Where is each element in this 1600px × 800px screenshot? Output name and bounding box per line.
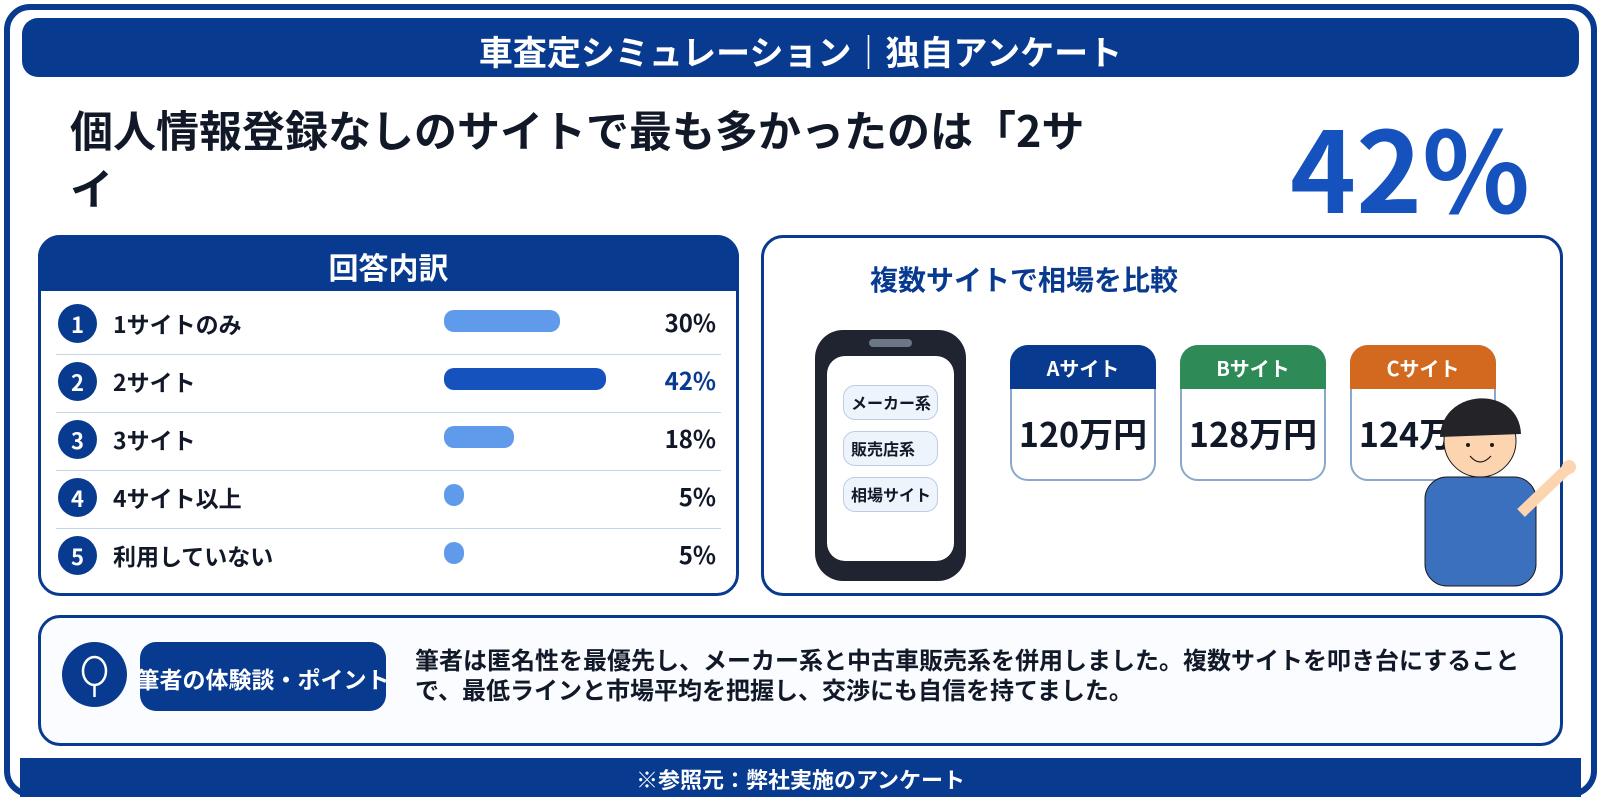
header banner: 車査定シミュレーション｜独自アンケート bbox=[479, 26, 1122, 75]
main heading: 個人情報登録なしのサイトで最も多かったのは「2サ bbox=[70, 98, 1084, 160]
icon: phone bbox=[815, 330, 966, 581]
icon: light bulb bbox=[62, 642, 127, 707]
key figure 42%: 42% bbox=[1290, 84, 1530, 246]
row 3: 3サイト bbox=[113, 422, 196, 456]
panel heading: response breakdown: 回答内訳 bbox=[328, 244, 448, 288]
phone list item: market site: 相場サイト bbox=[851, 482, 931, 506]
panel: compare sites bbox=[761, 235, 1563, 596]
main heading bbox=[70, 98, 1084, 218]
row 2: 2サイト bbox=[113, 364, 196, 398]
icon: presenter character bbox=[1424, 398, 1576, 586]
row 4: 5% bbox=[679, 478, 716, 513]
row 5: 5 bbox=[71, 540, 84, 572]
card: site B: Bサイト bbox=[1216, 353, 1290, 382]
experience text: 筆者は匿名性を最優先し、メーカー系と中古車販売系を併用しました。複数サイトを叩き台にすること bbox=[415, 641, 1519, 676]
row 1: 30% bbox=[665, 304, 716, 339]
card: site A bbox=[1010, 345, 1156, 481]
row 3: 18% bbox=[665, 420, 716, 455]
footer source note bbox=[20, 758, 1581, 797]
card: site A: 120万円 bbox=[1019, 408, 1147, 457]
panel heading: compare sites: 複数サイトで相場を比較 bbox=[870, 259, 1178, 299]
panel: response breakdown bbox=[38, 235, 739, 596]
row 3: 3 bbox=[71, 424, 84, 456]
card: site B bbox=[1180, 345, 1326, 481]
main heading: イ bbox=[70, 156, 113, 218]
row 2: 42% bbox=[665, 362, 716, 397]
experience text bbox=[415, 641, 1519, 706]
row 4: 4 bbox=[71, 482, 84, 514]
row 2: 2 bbox=[71, 366, 84, 398]
panel heading: response breakdown bbox=[38, 235, 739, 291]
card: site C: 124万円 bbox=[1359, 408, 1487, 457]
footer source note: ※参照元：弊社実施のアンケート bbox=[636, 763, 965, 795]
card: site B: 128万円 bbox=[1189, 408, 1317, 457]
experience text: で、最低ラインと市場平均を把握し、交渉にも自信を持てました。 bbox=[415, 671, 1133, 706]
phone list item: dealer: 販売店系 bbox=[851, 436, 915, 460]
card: site A: Aサイト bbox=[1047, 353, 1119, 382]
header banner bbox=[22, 18, 1579, 77]
phone list item: market site bbox=[843, 477, 938, 512]
card: site C bbox=[1350, 345, 1496, 481]
row 5: 5% bbox=[679, 536, 716, 571]
badge: author's points: 筆者の体験談・ポイント bbox=[136, 661, 390, 695]
card: site C: Cサイト bbox=[1386, 353, 1460, 382]
row 1: 1 bbox=[71, 308, 84, 340]
phone list item: maker: メーカー系 bbox=[851, 390, 931, 414]
row 5: 利用していない bbox=[113, 538, 273, 572]
phone list item: maker bbox=[843, 385, 938, 420]
row 1: 1サイトのみ bbox=[113, 306, 242, 340]
panel: author's experience bbox=[38, 615, 1563, 746]
phone list item: dealer bbox=[843, 431, 938, 466]
badge: author's points bbox=[140, 642, 386, 711]
row 4: 4サイト以上 bbox=[113, 480, 242, 514]
